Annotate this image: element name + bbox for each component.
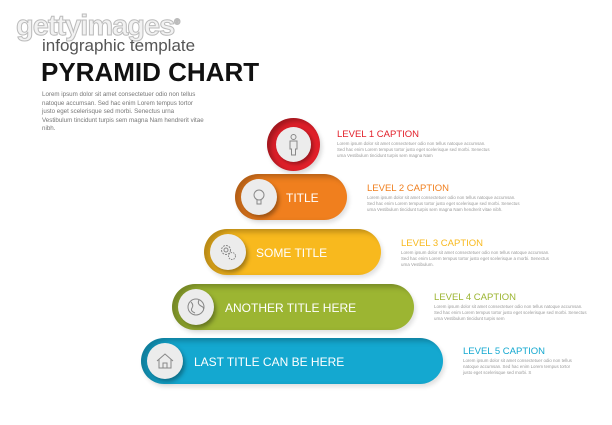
level 5 bar: LAST TITLE CAN BE HERE (194, 355, 344, 369)
watermark: gettyimages® (16, 10, 179, 42)
caption 4: LEVEL 4 CAPTION (434, 292, 516, 303)
level 3 bar (204, 229, 381, 275)
level 3 bar: SOME TITLE (256, 246, 327, 260)
caption 5: Lorem ipsum dolor sit amet consectetuer odio non tellus natoque accumsan. Sed hac enim Lorem tempus tortor justo eget scelerisque sed morbi. S (463, 358, 572, 375)
intro text: Lorem ipsum dolor sit amet consectetuer odio non tellus natoque accumsan. Sed hac enim Lorem tempus tortor justo eget scelerisque sed morbi. Senectus urna Vestibulum tincidunt turpis sem magna Nam hendrerit vitae nibh. (42, 91, 204, 132)
icon: globe (178, 289, 214, 325)
caption 2 (367, 183, 520, 212)
icon: bulb (241, 179, 277, 215)
caption 1: Lorem ipsum dolor sit amet consectetuer odio non tellus natoque accumsan. Sed hac enim Lorem tempus tortor justo eget scelerisque sed morbi. Senectus urna Vestibulum tincidunt turpis sem magna Nam (337, 141, 490, 158)
caption 5 (462, 346, 572, 375)
caption 3: LEVEL 3 CAPTION (401, 238, 483, 249)
level 2 bar: TITLE (286, 191, 319, 205)
level 4 bar: ANOTHER TITLE HERE (225, 301, 356, 315)
caption 4 (434, 292, 587, 321)
level 4 bar (172, 284, 414, 330)
caption 2: Lorem ipsum dolor sit amet consectetuer odio non tellus natoque accumsan. Sed hac enim Lorem tempus tortor justo eget scelerisque sed morbi. Senectus urna Vestibulum tincidunt turpis sem magna Nam hendrerit vitae nibh. (367, 195, 520, 212)
level 5 bar (141, 338, 443, 384)
icon: gears (210, 234, 246, 270)
caption 5: LEVEL 5 CAPTION (463, 346, 545, 357)
title: PYRAMID CHART (41, 57, 259, 87)
caption 4: Lorem ipsum dolor sit amet consectetuer odio non tellus natoque accumsan. Sed hac enim Lorem tempus tortor justo eget scelerisque sed morbi. Senectus urna Vestibulum tincidunt turpis sem (434, 304, 587, 321)
level 1 circle (267, 118, 320, 171)
caption 3 (401, 238, 549, 267)
subtitle: infographic template (42, 36, 195, 55)
caption 2: LEVEL 2 CAPTION (367, 183, 449, 194)
icon: person (276, 127, 311, 162)
level 2 bar (235, 174, 347, 220)
caption 1: LEVEL 1 CAPTION (337, 129, 419, 140)
caption 3: Lorem ipsum dolor sit amet consectetuer odio non tellus natoque accumsan. Sed hac enim Lorem tempus tortor justo eget scelerisque a morbi. Senectus urna Vestibulum. (401, 250, 549, 267)
caption 1 (337, 129, 490, 158)
icon: house (147, 343, 183, 379)
